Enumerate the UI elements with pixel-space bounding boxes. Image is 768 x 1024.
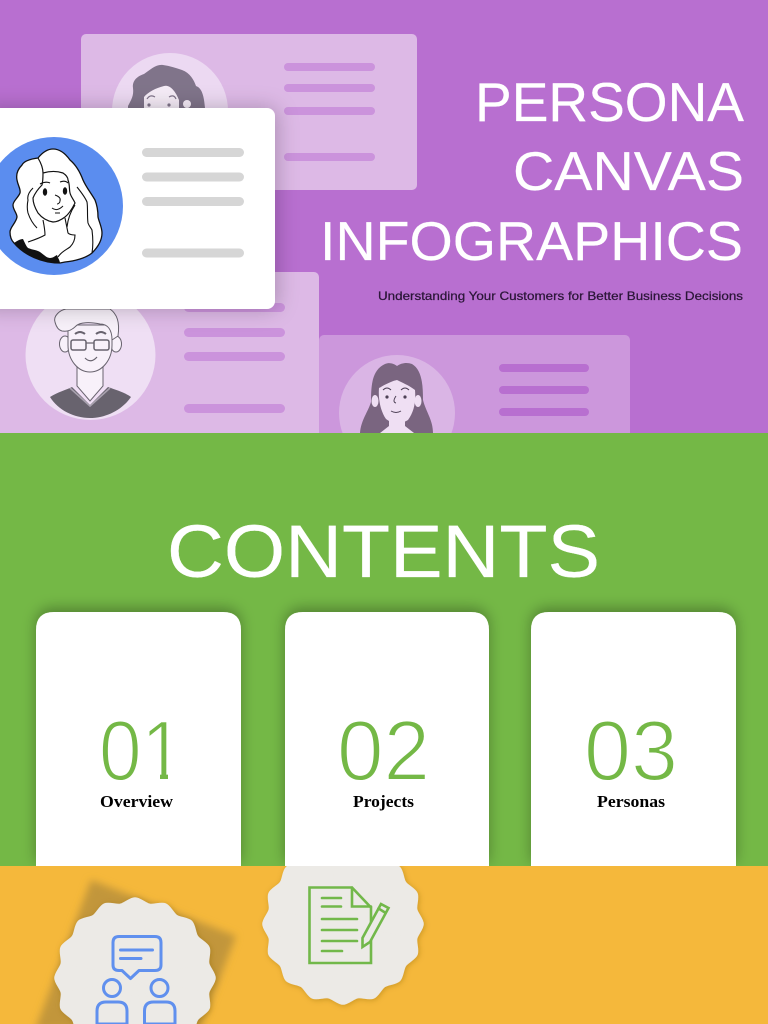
icon: two people talking bbox=[97, 936, 175, 1024]
card: overview: Overview bbox=[100, 792, 174, 811]
card: personas bbox=[531, 612, 736, 866]
subtitle: Understanding Your Customers for Better Business Decisions bbox=[378, 289, 743, 303]
persona card: bottom right bbox=[319, 335, 630, 433]
card: projects: Projects bbox=[353, 792, 414, 811]
title: INFOGRAPHICS bbox=[320, 210, 743, 272]
avatar: woman with wavy hair bbox=[10, 149, 102, 263]
card: projects bbox=[285, 612, 489, 866]
badge: conversation icon bbox=[54, 898, 216, 1024]
badge: document icon bbox=[262, 844, 424, 1004]
card: personas: 03 bbox=[584, 704, 678, 799]
title: CANVAS bbox=[513, 140, 744, 202]
heading: contents: CONTENTS bbox=[167, 510, 600, 593]
card: personas: Personas bbox=[597, 792, 665, 811]
panel: purple header bbox=[0, 0, 768, 471]
panel: yellow footer bbox=[0, 866, 768, 1024]
avatar: man with glasses bbox=[50, 309, 131, 418]
icon: document and pencil bbox=[310, 888, 388, 963]
persona card: front white bbox=[0, 108, 275, 309]
title bbox=[325, 82, 744, 261]
rotated square shadow bbox=[35, 880, 236, 1024]
number 01 bbox=[102, 722, 168, 780]
title: PERSONA bbox=[475, 71, 744, 133]
card: projects: 02 bbox=[337, 704, 430, 799]
number 01: 01 bbox=[99, 704, 184, 799]
panel: contents bbox=[0, 433, 768, 866]
card: overview bbox=[36, 612, 241, 866]
persona card: top back bbox=[81, 34, 417, 190]
persona card: lower left bbox=[0, 272, 319, 447]
